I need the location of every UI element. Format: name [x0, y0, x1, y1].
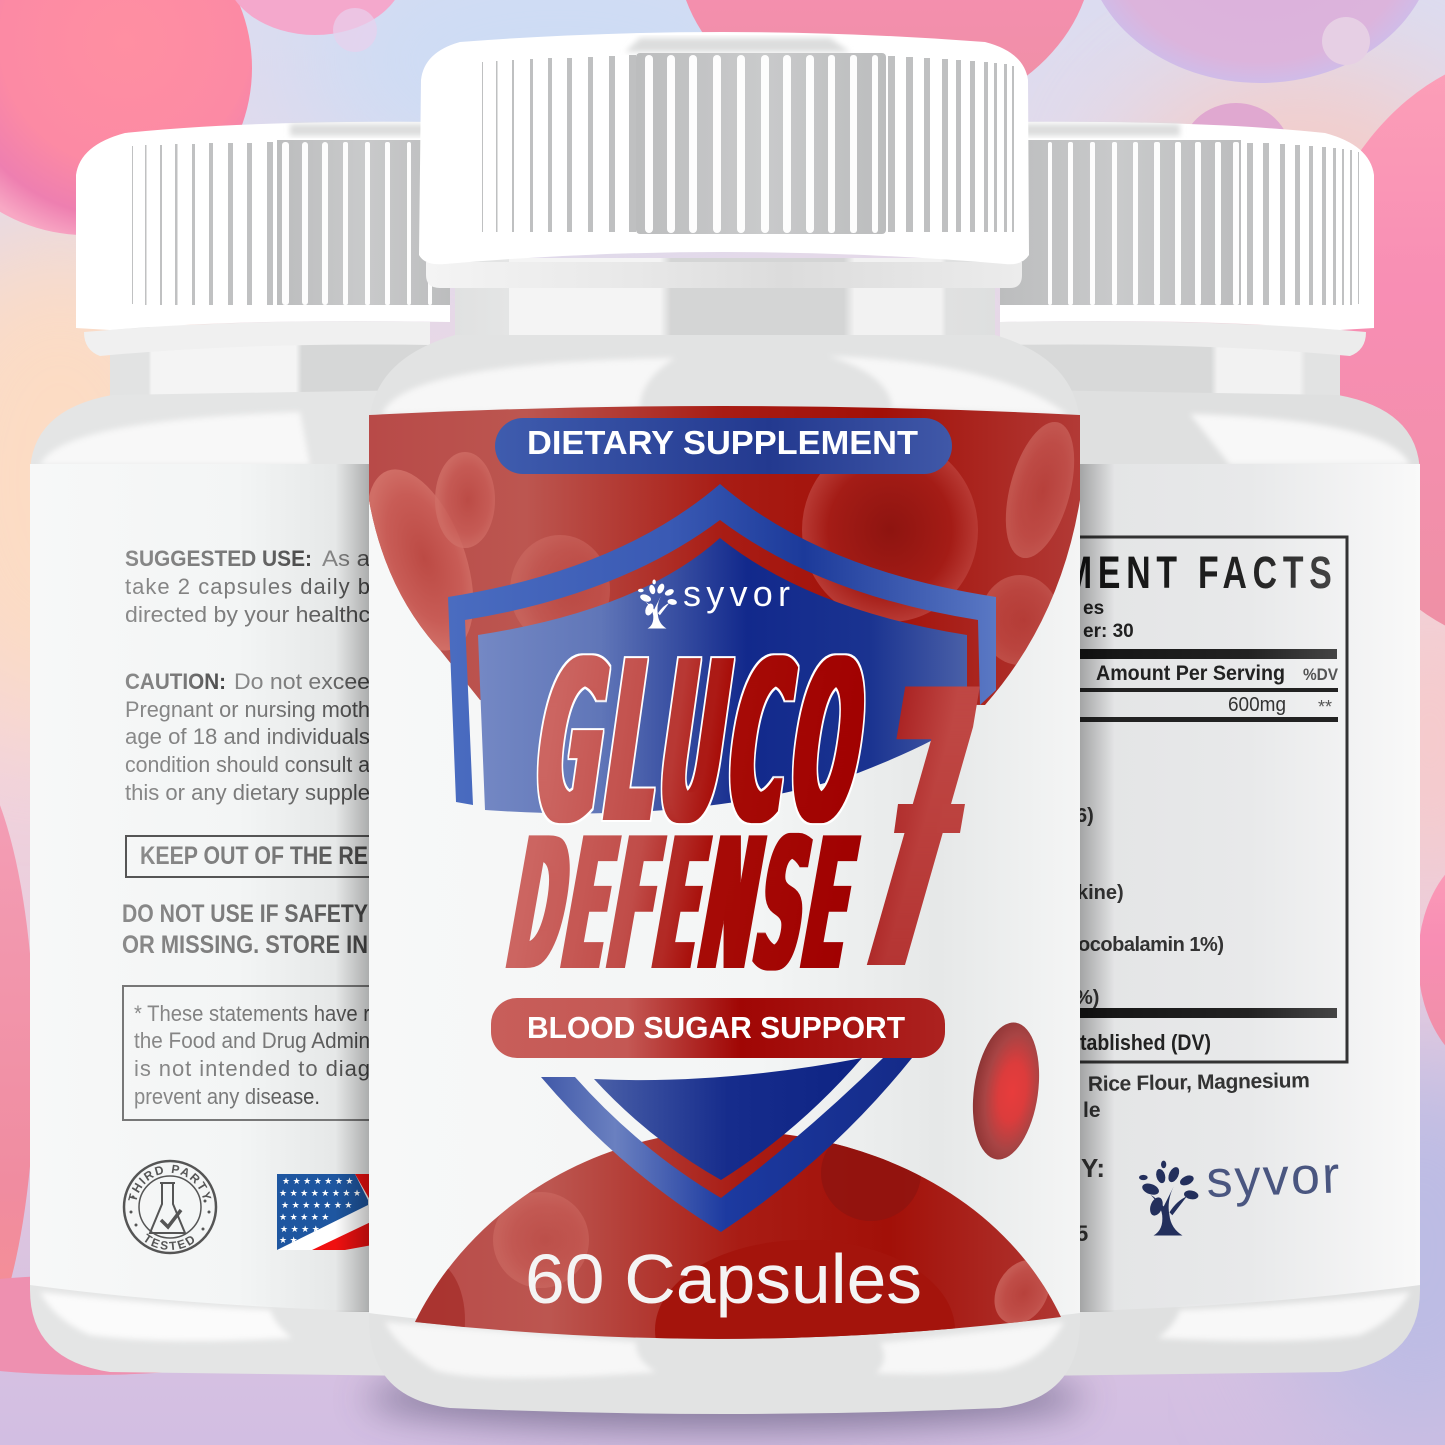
neck	[455, 258, 995, 350]
fda statement box: is not intended to diag	[134, 1056, 370, 1081]
left bottom highlight	[40, 1292, 292, 1341]
blood sugar support pill	[491, 998, 945, 1058]
bottom red dome	[415, 1134, 1061, 1339]
safety warning: DO NOT USE IF SAFETY	[122, 900, 368, 928]
syvor front logo: syvor	[683, 573, 790, 614]
bottom highlights	[385, 1322, 1064, 1378]
syvor front logo	[638, 573, 790, 628]
right bottom highlight	[1158, 1292, 1410, 1341]
third party tested badge: TESTED	[144, 1233, 194, 1250]
syvor logo	[1139, 1146, 1340, 1236]
usa flag: ★ ★	[279, 1235, 298, 1245]
upper shield outer band	[448, 484, 996, 805]
right bottle neck	[1000, 325, 1340, 400]
product name gluco: GLUCO	[523, 616, 886, 873]
distributed by text: Y:	[1081, 1153, 1105, 1183]
caution text: this or any dietary supple	[125, 780, 370, 805]
left panel shadow	[335, 464, 375, 1312]
number seven: 7	[847, 611, 990, 1056]
suggested use text: SUGGESTED USE:	[125, 546, 312, 571]
blood sugar support pill: BLOOD SUGAR SUPPORT	[527, 1010, 905, 1045]
safety warning: OR MISSING. STORE IN	[122, 931, 368, 959]
capsule count: 60 Capsules	[525, 1240, 922, 1318]
left bottle neck	[110, 325, 430, 400]
right bottle label	[1040, 464, 1420, 1312]
usa flag: ★ ★ ★ ★ ★ ★ ★	[282, 1176, 353, 1186]
left shoulder highlight	[40, 412, 310, 465]
other ingredients: le	[1083, 1099, 1101, 1122]
supplement facts table	[1040, 537, 1347, 1062]
suggested use text: As a	[322, 546, 371, 571]
other ingredients	[1083, 1069, 1310, 1122]
cap top rim	[625, 38, 850, 52]
front bottle	[345, 32, 1087, 1420]
top red blood cell field	[369, 406, 1080, 705]
left bottle label	[30, 464, 410, 1312]
supplement facts table: es	[1083, 598, 1104, 619]
right panel shadow	[1075, 464, 1115, 1312]
third party tested badge: THIRD PARTY	[128, 1164, 212, 1200]
left bottle body	[30, 390, 420, 1376]
supplement facts table: er: 30	[1083, 621, 1134, 642]
caution text	[125, 669, 371, 805]
shoulder highlights	[382, 356, 1068, 415]
usa flag	[277, 1174, 400, 1250]
syvor logo: syvor	[1205, 1146, 1340, 1209]
label	[369, 406, 1080, 1336]
caution text: CAUTION:	[125, 669, 226, 694]
upper shield inner fill	[478, 538, 967, 813]
fda statement box: the Food and Drug Admin	[134, 1028, 370, 1053]
left bottle collar	[84, 321, 430, 356]
supplement facts table: ocobalamin 1%)	[1078, 934, 1224, 956]
supplement facts table: %)	[1075, 987, 1099, 1009]
supplement facts table: **	[1318, 697, 1332, 717]
cap ribs	[482, 53, 1014, 234]
body	[369, 335, 1080, 1414]
supplement facts table: MENT FACTS	[1064, 548, 1332, 598]
usa flag: ★ ★ ★ ★	[280, 1224, 320, 1234]
left cap ribs	[132, 140, 450, 305]
right bottle body	[1030, 390, 1420, 1376]
suggested use text: directed by your healthc	[125, 602, 370, 627]
right bottle cap	[1000, 122, 1374, 330]
back bottle right: supplement facts panel	[1000, 122, 1420, 1376]
supplement facts table: 600mg	[1228, 694, 1286, 716]
supplement facts table: tablished (DV)	[1080, 1030, 1211, 1055]
supplement facts table: 6)	[1076, 805, 1094, 827]
right bottle collar	[1000, 321, 1366, 356]
supplement facts table: Amount Per Serving	[1096, 662, 1285, 685]
dietary supplement pill: DIETARY SUPPLEMENT	[527, 424, 918, 461]
supplement facts table: kine)	[1077, 882, 1124, 904]
cap	[419, 32, 1029, 264]
usa flag: ★ ★ ★ ★ ★	[279, 1212, 329, 1222]
usa flag: ★ ★ ★ ★ ★ ★ ★ ★	[279, 1188, 361, 1198]
keep out box: KEEP OUT OF THE RE	[140, 842, 368, 870]
product name defense: DEFENSE	[496, 800, 873, 1012]
left cap top rim	[290, 124, 450, 136]
front bottle shadow	[365, 1366, 1085, 1430]
other ingredients: Rice Flour, Magnesium	[1088, 1069, 1310, 1096]
left bottle cap	[76, 122, 450, 330]
caution text: Do not excee	[234, 669, 370, 694]
distributed by text	[1076, 1153, 1105, 1246]
usa flag: ★ ★ ★ ★ ★ ★ ★	[281, 1200, 352, 1210]
lower shield outer band	[541, 1058, 912, 1232]
keep out box	[126, 836, 396, 877]
caution text: condition should consult a	[125, 752, 371, 777]
caution text: age of 18 and individuals	[125, 724, 370, 749]
supplement facts table: %DV	[1303, 665, 1339, 684]
third party tested badge	[122, 1160, 218, 1254]
red blood cell	[965, 1018, 1047, 1164]
right cap top rim	[1000, 124, 1180, 136]
lower shield inner fill	[594, 1058, 862, 1180]
right cap ribs	[1000, 140, 1359, 305]
distributed by text: 5	[1076, 1221, 1088, 1246]
right shoulder highlight	[1190, 414, 1410, 465]
suggested use text: take 2 capsules daily b	[125, 574, 370, 599]
dietary supplement pill	[495, 418, 952, 474]
fda statement box: prevent any disease.	[134, 1084, 320, 1109]
safety warning	[122, 900, 368, 959]
suggested use text	[125, 546, 371, 627]
caution text: Pregnant or nursing moth	[125, 697, 370, 722]
collar ring under cap	[426, 262, 1022, 288]
fda statement box: * These statements have r	[134, 1001, 370, 1026]
fda statement box	[123, 986, 393, 1120]
back bottle left: suggested use panel	[30, 122, 450, 1376]
